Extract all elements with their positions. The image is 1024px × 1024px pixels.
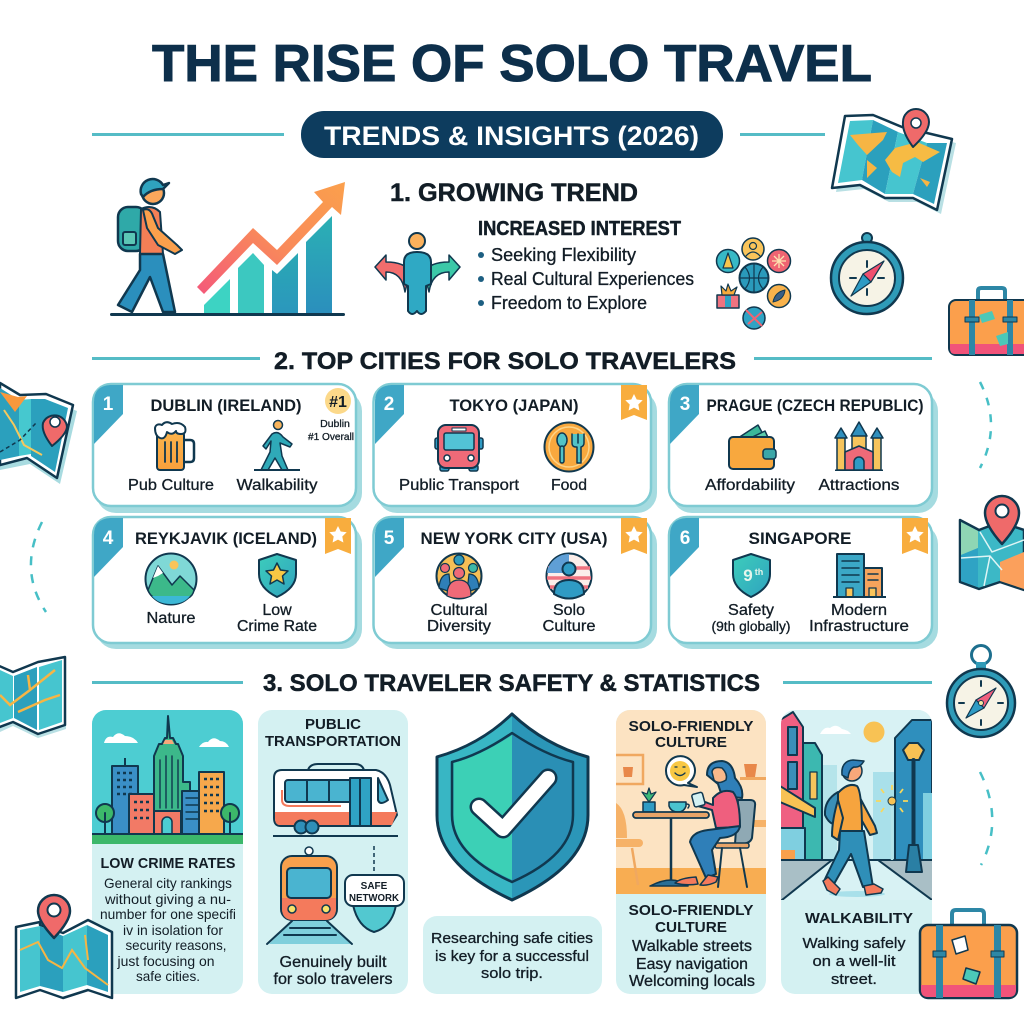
panel: New York City: Cultural xyxy=(430,602,488,619)
panel: New York City xyxy=(374,517,657,649)
icon: suitcase bottom right xyxy=(920,910,1017,998)
icon: left map lower xyxy=(0,657,66,738)
icon: cathedral xyxy=(835,422,883,471)
panel: Reykjavik xyxy=(93,517,362,649)
panel: Tokyo: Public Transport xyxy=(399,477,520,494)
bar chart with rising arrow xyxy=(197,182,345,313)
panel: public transportation xyxy=(258,710,408,994)
panel: low crime rates: security reasons, xyxy=(126,937,226,953)
panel: Reykjavik: Low xyxy=(262,602,292,619)
callout: safe network: SAFE xyxy=(361,881,388,892)
city skyline illustration xyxy=(92,710,243,844)
icon: walking figure xyxy=(254,420,300,471)
panel: New York City: Solo xyxy=(553,602,585,619)
callout: safe network: NETWORK xyxy=(349,893,400,904)
icon: compass xyxy=(831,233,903,314)
panel: solo-friendly culture: Walkable streets xyxy=(632,938,752,955)
panel: Singapore: Modern xyxy=(831,602,887,619)
icon: ninth place shield xyxy=(733,554,770,597)
panel: Singapore: Infrastructure xyxy=(809,618,909,635)
panel: low crime rates: just focusing on xyxy=(117,953,214,969)
icon: person at crossroads xyxy=(375,233,460,314)
dashed route right upper xyxy=(980,382,991,468)
panel: public transportation: TRANSPORTATION xyxy=(265,733,401,750)
section 1 heading: 1. GROWING TREND xyxy=(390,179,638,207)
dashed route right lower xyxy=(980,772,992,865)
icon: suitcase top right xyxy=(949,288,1024,355)
cafe illustration xyxy=(612,710,766,894)
icon: large safety shield xyxy=(437,714,588,900)
panel: Singapore: Safety xyxy=(728,602,774,619)
panel: walkability xyxy=(780,710,934,994)
badge: number one: #1 Overall xyxy=(308,431,354,443)
icon: cultural diversity xyxy=(436,554,482,598)
text block: increased interest: INCREASED INTEREST xyxy=(478,218,681,240)
panel: Prague: 3 xyxy=(680,394,690,415)
text block: increased interest xyxy=(478,218,694,313)
icon: front-view train xyxy=(267,847,352,944)
panel: Reykjavik: 4 xyxy=(103,528,114,549)
panel: solo-friendly culture xyxy=(612,710,766,994)
panel: low crime rates: number for one specifi xyxy=(100,906,236,922)
icon: ninth place shield: 9 xyxy=(743,566,753,585)
icon: experience cluster xyxy=(716,238,790,329)
panel: Dublin: Pub Culture xyxy=(128,477,214,494)
panel: Dublin: DUBLIN (IRELAND) xyxy=(150,396,302,415)
text panel: researching safe cities: solo trip. xyxy=(481,965,543,982)
panel: public transportation: PUBLIC xyxy=(305,716,361,733)
panel: Prague: PRAGUE (CZECH REPUBLIC) xyxy=(706,396,924,415)
panel: walkability: WALKABILITY xyxy=(805,910,913,927)
panel: walkability: on a well-lit xyxy=(812,953,896,970)
panel: Prague xyxy=(669,384,938,513)
dashed route left xyxy=(31,522,46,612)
text block: increased interest: Real Cultural Experiences xyxy=(491,269,694,289)
panel: Dublin: Walkability xyxy=(236,477,318,494)
panel: Dublin xyxy=(93,384,362,513)
icon: left folded map xyxy=(0,383,77,484)
panel: low crime rates xyxy=(92,710,243,994)
panel: Singapore: SINGAPORE xyxy=(748,529,852,548)
panel: low crime rates: iv in isolation for xyxy=(123,922,223,938)
icon: tram xyxy=(273,764,398,837)
icon: modern buildings xyxy=(833,554,886,598)
panel: Reykjavik: REYKJAVIK (ICELAND) xyxy=(135,529,317,548)
panel: solo-friendly culture: CULTURE xyxy=(655,734,727,751)
panel: New York City: 5 xyxy=(384,528,395,549)
panel: low crime rates: without giving a nu- xyxy=(104,891,231,907)
panel: Singapore: (9th globally) xyxy=(712,619,790,634)
panel: Reykjavik: Crime Rate xyxy=(237,618,317,635)
panel: Reykjavik: Nature xyxy=(146,610,196,627)
panel: solo-friendly culture: CULTURE xyxy=(655,919,727,936)
panel: New York City: Diversity xyxy=(427,618,491,635)
street illustration xyxy=(780,710,934,902)
icon: ninth place shield: th xyxy=(755,567,763,577)
text panel: researching safe cities: is key for a successful xyxy=(435,948,589,965)
panel: solo-friendly culture: Welcoming locals xyxy=(629,973,755,990)
icon: right map with pin xyxy=(960,496,1024,590)
panel: Tokyo: Food xyxy=(551,477,587,494)
title: THE RISE OF SOLO TRAVEL xyxy=(152,35,872,93)
icon: plate with utensils xyxy=(544,422,594,472)
badge: number one xyxy=(308,388,354,443)
panel: solo-friendly culture: SOLO-FRIENDLY xyxy=(628,718,754,735)
icon: world map with pin xyxy=(832,109,956,214)
panel: Singapore: 6 xyxy=(680,528,690,549)
subtitle pill: TRENDS & INSIGHTS (2026) xyxy=(324,121,699,151)
panel: Tokyo xyxy=(374,384,657,513)
icon: solo culture xyxy=(546,554,592,598)
panel: solo-friendly culture: SOLO-FRIENDLY xyxy=(628,902,754,919)
panel: Prague: Attractions xyxy=(818,477,900,494)
panel: Dublin: 1 xyxy=(103,394,114,415)
panel: low crime rates: General city rankings xyxy=(104,875,232,891)
text panel: researching safe cities: Researching safe cities xyxy=(431,930,593,947)
panel: New York City: NEW YORK CITY (USA) xyxy=(420,529,608,548)
panel: walkability: Walking safely xyxy=(802,935,906,952)
text block: increased interest: Seeking Flexibility xyxy=(491,245,636,265)
badge: number one: Dublin xyxy=(320,418,350,430)
callout: safe network xyxy=(345,846,404,932)
panel: solo-friendly culture: Easy navigation xyxy=(636,956,748,973)
text block: increased interest: Freedom to Explore xyxy=(491,293,647,313)
panel: low crime rates: LOW CRIME RATES xyxy=(100,855,236,872)
panel: public transportation: Genuinely built xyxy=(280,954,387,971)
icon: beer mug xyxy=(155,422,194,470)
section 2 heading: 2. TOP CITIES FOR SOLO TRAVELERS xyxy=(274,348,736,375)
text panel: researching safe cities xyxy=(423,916,602,994)
panel: Tokyo: TOKYO (JAPAN) xyxy=(450,396,578,415)
icon: bus xyxy=(435,425,483,471)
subtitle pill xyxy=(301,111,723,158)
icon: walking backpacker xyxy=(110,179,345,316)
panel: Prague: Affordability xyxy=(705,477,795,494)
panel: Singapore xyxy=(669,517,938,649)
icon: shield with star xyxy=(259,554,296,597)
panel: public transportation: for solo travelers xyxy=(274,971,393,988)
icon: bottom-left map with pin xyxy=(16,895,112,998)
panel: walkability: street. xyxy=(831,971,877,988)
panel: low crime rates: safe cities. xyxy=(136,968,200,984)
icon: nature xyxy=(146,554,196,604)
icon: wallet xyxy=(729,425,776,469)
panel: New York City: Culture xyxy=(542,618,596,635)
badge: number one: #1 xyxy=(329,394,347,411)
icon: compass lower xyxy=(947,646,1015,737)
section 3 heading: 3. SOLO TRAVELER SAFETY & STATISTICS xyxy=(263,670,760,697)
panel: Tokyo: 2 xyxy=(384,394,394,415)
